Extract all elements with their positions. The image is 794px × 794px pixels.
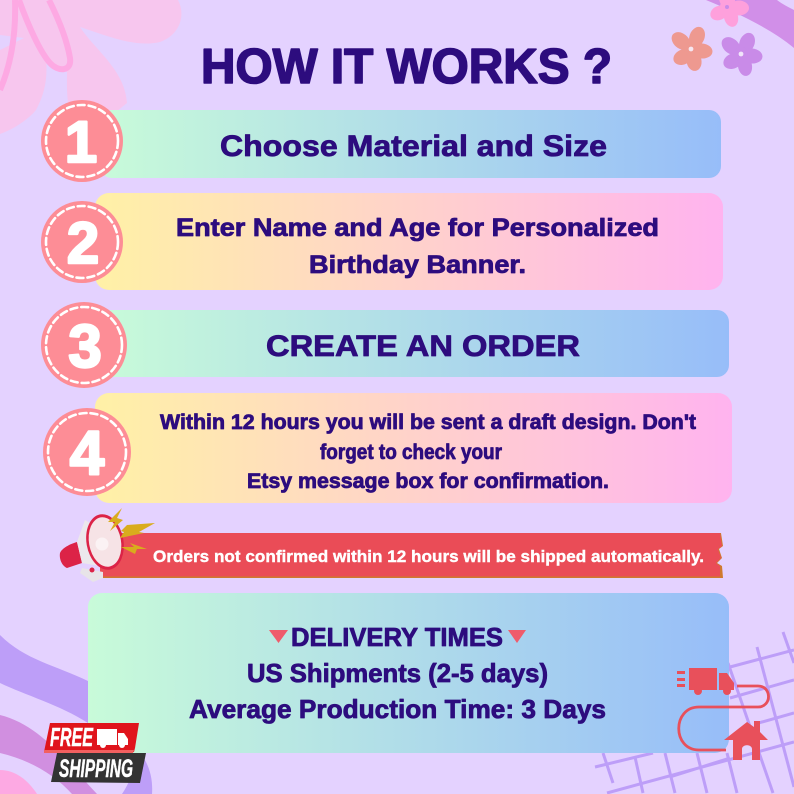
badge: step 4: 4 xyxy=(70,419,105,488)
decoration: pink flower top left xyxy=(0,0,181,134)
badge: step 3 xyxy=(41,302,127,388)
decoration: grid bottom right xyxy=(595,632,794,793)
house xyxy=(724,721,768,760)
step 4 text xyxy=(160,411,696,493)
step 4 text: Etsy message box for confirmation. xyxy=(247,470,609,493)
icon: small truck xyxy=(97,729,128,748)
banner: warning xyxy=(100,533,723,578)
icon: coral flower xyxy=(668,24,713,72)
badge: step 4 xyxy=(43,408,131,496)
panel: step 1 xyxy=(100,110,721,178)
icon: route with truck and house xyxy=(677,668,768,760)
badge: step 3: 3 xyxy=(68,313,102,380)
panel: step 4 xyxy=(95,393,732,503)
step 3 text: CREATE AN ORDER xyxy=(266,330,580,363)
banner text: Orders not confirmed within 12 hours will be shipped automatically. xyxy=(153,547,704,566)
decoration: purple swoosh top right xyxy=(706,0,794,48)
icon: megaphone xyxy=(60,508,155,582)
title: HOW IT WORKS ? xyxy=(201,40,612,94)
step 2 text xyxy=(176,214,659,279)
badge: step 2 xyxy=(41,201,123,283)
icon: purple flower xyxy=(718,30,763,77)
icon: pink flower xyxy=(708,0,749,28)
panel: delivery times xyxy=(88,593,729,753)
shipping label: SHIPPING xyxy=(59,755,133,783)
panel: step 2 xyxy=(95,193,723,290)
step 4 text: Within 12 hours you will be sent a draft design. Don't xyxy=(160,411,696,434)
step 1 text: Choose Material and Size xyxy=(220,130,607,163)
badge: free shipping xyxy=(44,722,146,783)
delivery detail text: US Shipments (2-5 days) xyxy=(247,658,548,688)
truck xyxy=(677,668,734,695)
badge: step 1 xyxy=(41,100,123,182)
delivery detail text: Average Production Time: 3 Days xyxy=(189,694,606,724)
step 4 text: forget to check your xyxy=(320,441,502,464)
badge: step 2: 2 xyxy=(67,211,99,276)
heading: delivery times: DELIVERY TIMES xyxy=(291,622,503,652)
decoration: waves bottom left xyxy=(0,635,152,794)
panel: step 3 xyxy=(100,310,729,377)
step 2 text: Enter Name and Age for Personalized xyxy=(176,214,659,242)
badge: step 1: 1 xyxy=(65,110,97,175)
free label: FREE xyxy=(50,722,93,752)
step 2 text: Birthday Banner. xyxy=(309,251,526,279)
icon: triangle left xyxy=(269,630,288,643)
delivery detail text xyxy=(189,658,606,724)
icon: triangle right xyxy=(508,630,526,643)
